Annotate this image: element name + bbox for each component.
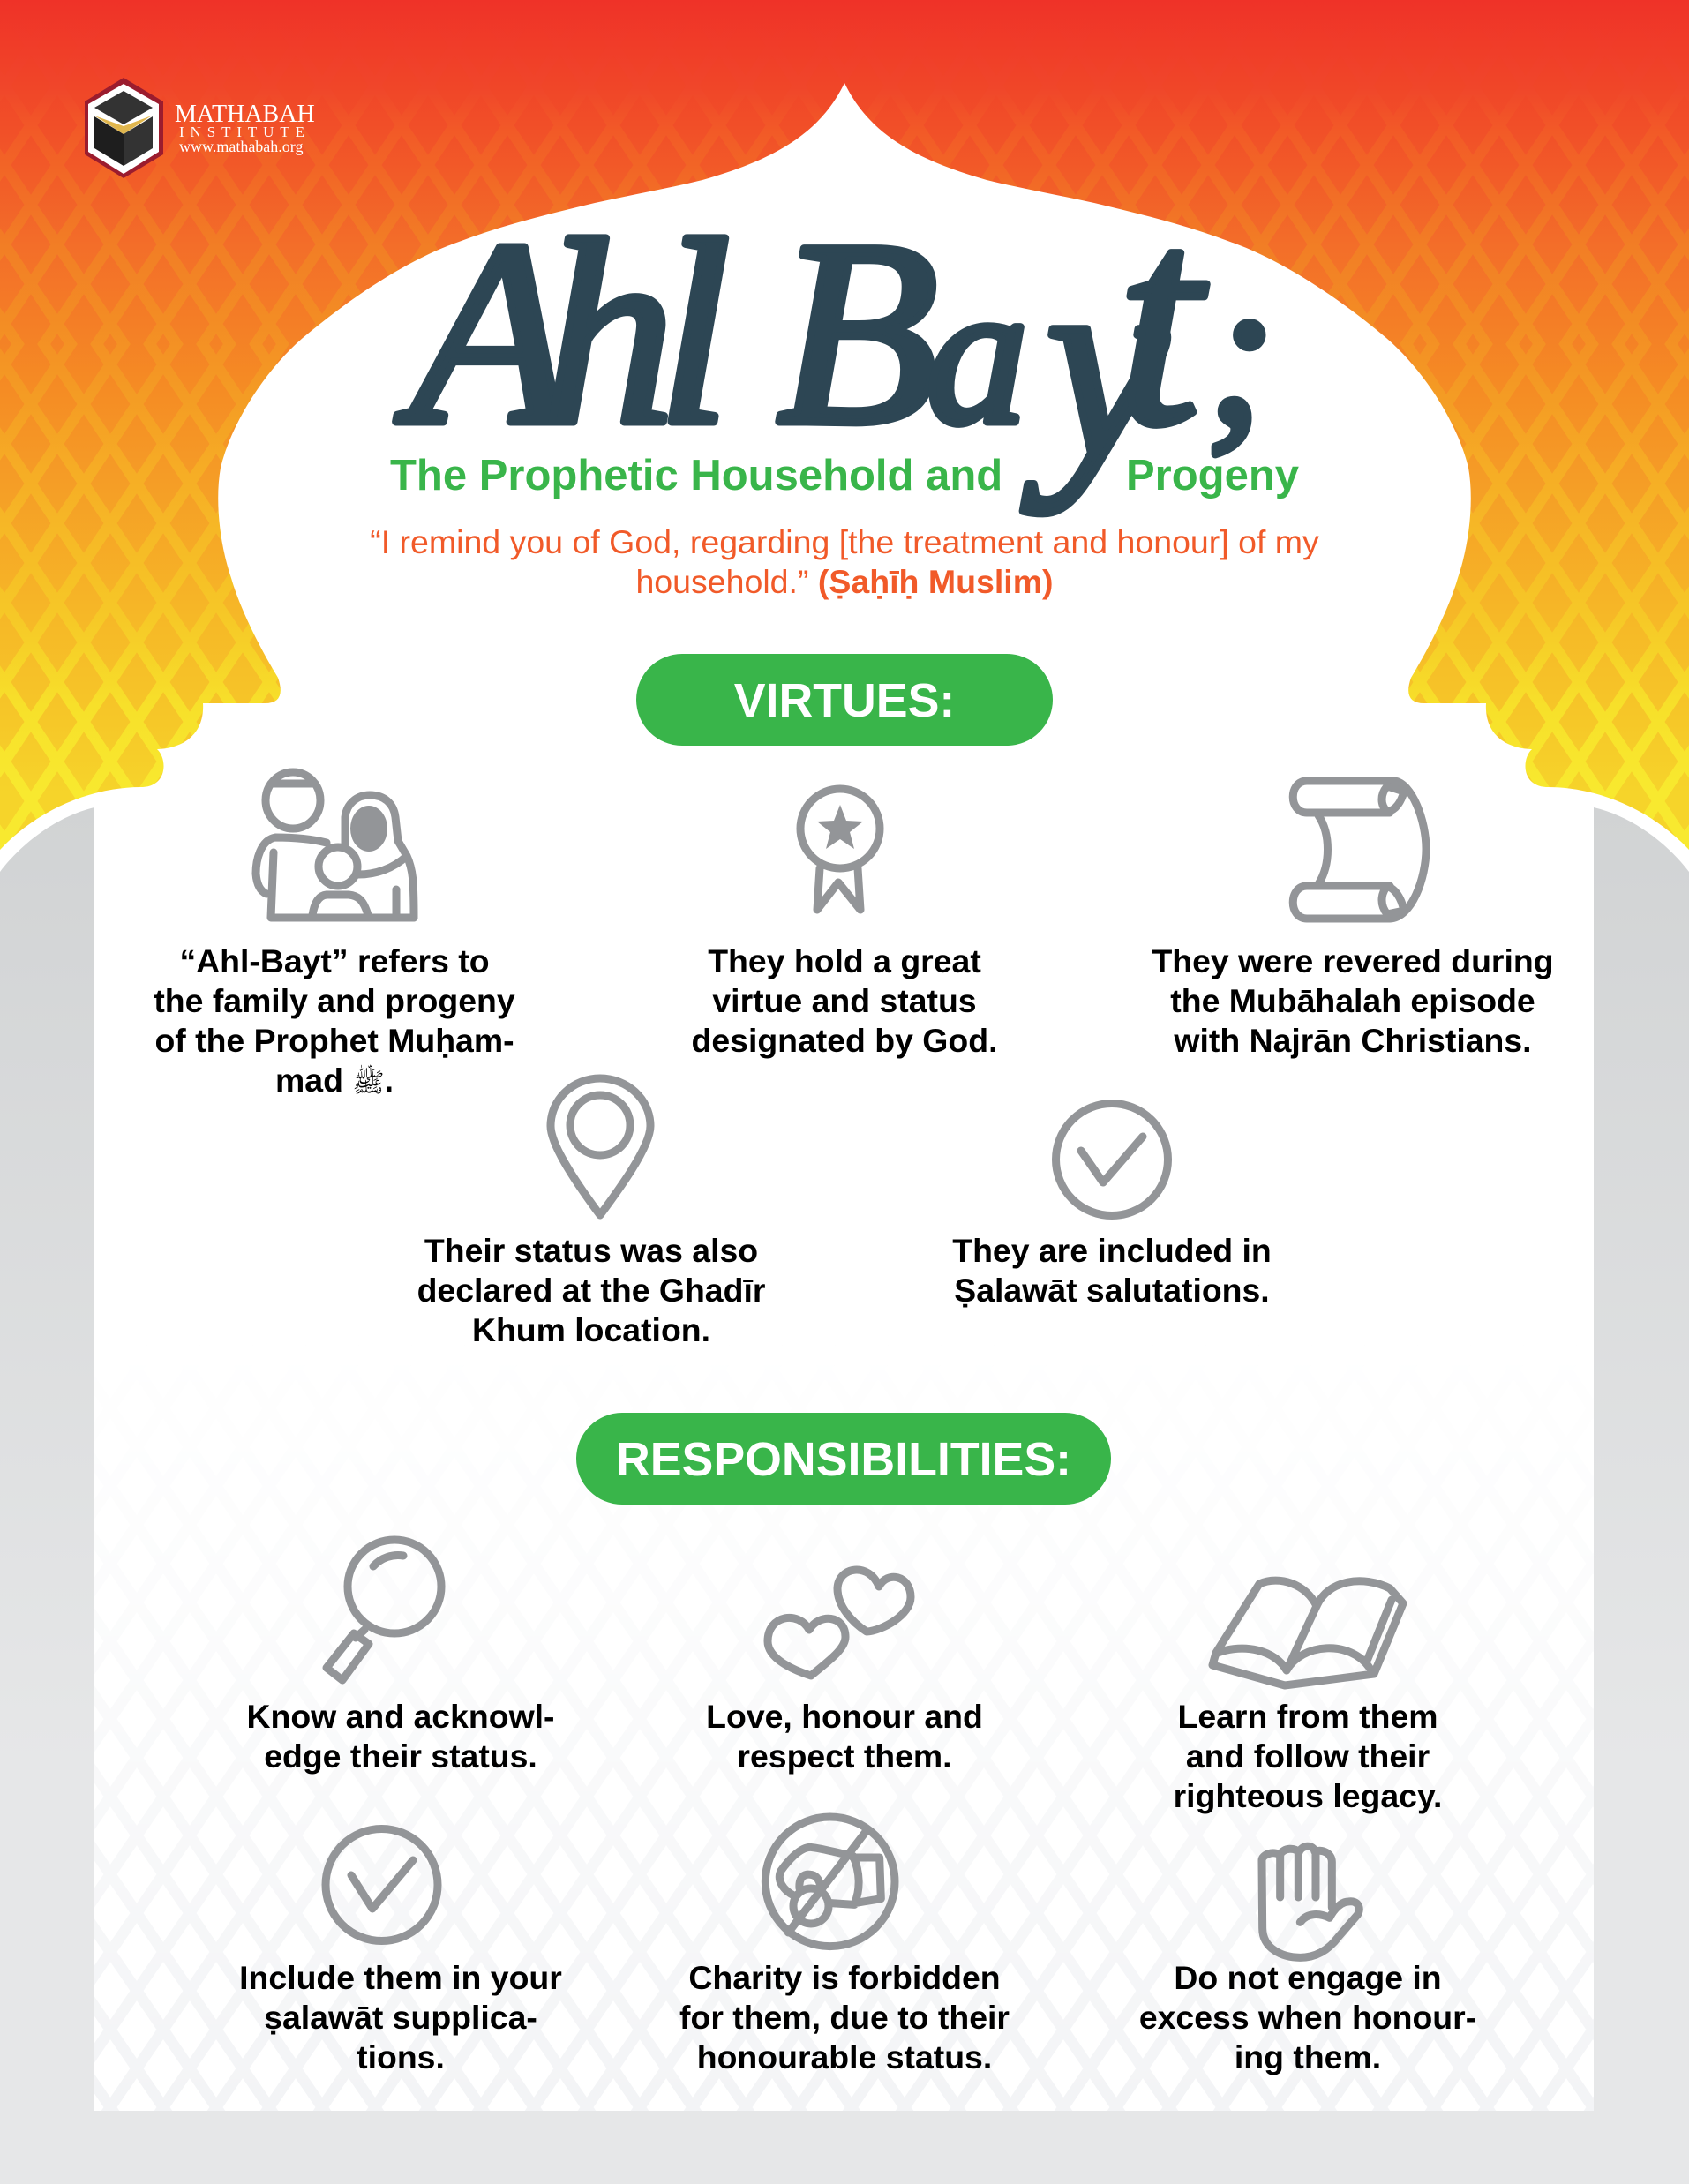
text: include in salawat: ṣalawāt supplica- — [264, 1999, 537, 2036]
quote: household.” (Ṣaḥīḥ Muslim) — [635, 563, 1054, 600]
subtitle: The Prophetic Household and — [390, 452, 1002, 499]
heading: responsibilities: RESPONSIBILITIES: — [616, 1433, 1071, 1486]
text: Mubahalah: They were revered during — [1152, 942, 1554, 979]
dome: white arch shape — [0, 83, 1689, 971]
text: know status — [246, 1698, 554, 1775]
text: Ghadir Khum: Khum location. — [472, 1311, 710, 1348]
text: definition: “Ahl-Bayt” refers to — [179, 942, 490, 979]
text: no excess: ing them. — [1235, 2038, 1381, 2075]
text: Ghadir Khum: Their status was also — [424, 1232, 758, 1269]
text: virtue and status: virtue and status — [712, 982, 977, 1019]
logo: Mathabah Institute — [85, 78, 315, 178]
title: A — [394, 186, 575, 479]
title: l — [657, 186, 731, 479]
text: Mubahalah: the Mubāhalah episode — [1170, 982, 1535, 1019]
background: sunset gradient with lattice — [0, 0, 1689, 882]
text: Mubahalah — [1152, 942, 1554, 1059]
logo: Mathabah Institute: www.mathabah.org — [179, 138, 303, 155]
text: no excess: Do not engage in — [1174, 1959, 1442, 1996]
text: Ghadir Khum: declared at the Ghadīr — [417, 1272, 765, 1309]
title: y — [1020, 212, 1169, 514]
text: no excess — [1139, 1959, 1476, 2075]
icons: virtues and responsibilities — [256, 772, 1426, 1957]
text: no excess: excess when honour- — [1139, 1999, 1476, 2036]
text: Salawat: They are included in — [952, 1232, 1272, 1269]
icon: no charity — [765, 1817, 895, 1947]
text: love and honour: Love, honour and — [706, 1698, 983, 1735]
text: include in salawat: Include them in your — [239, 1959, 562, 1996]
text: Salawat — [952, 1232, 1272, 1309]
text: learn and follow: and follow their — [1186, 1737, 1430, 1775]
text: charity forbidden: honourable status. — [697, 2038, 992, 2075]
title: B — [777, 186, 938, 479]
text: definition: of the Prophet Muḥam- — [154, 1022, 514, 1059]
icon: location pin — [551, 1078, 650, 1215]
text: know status: edge their status. — [264, 1737, 537, 1775]
quote: “I remind you of God, regarding [the treatment and honour] of my — [370, 523, 1319, 560]
logo: Mathabah Institute: MATHABAH — [175, 101, 315, 128]
text: definition: mad ﷺ. — [275, 1062, 394, 1099]
text: love and honour — [706, 1698, 983, 1775]
icon: open book — [1212, 1580, 1403, 1685]
text: Ghadir Khum — [417, 1232, 765, 1348]
text: definition — [154, 942, 515, 1099]
title: a — [927, 241, 1028, 466]
text: virtue and status: They hold a great — [708, 942, 981, 979]
icon: raised hand — [1262, 1846, 1359, 1957]
text: learn and follow: Learn from them — [1177, 1698, 1438, 1735]
side frame: grey panel surround — [0, 807, 1689, 2184]
logo: Mathabah Institute: INSTITUTE — [179, 124, 304, 140]
heading: virtues — [636, 654, 1053, 746]
icon: medal — [800, 789, 880, 910]
text: charity forbidden: Charity is forbidden — [688, 1959, 1001, 1996]
text: definition: the family and progeny — [154, 982, 515, 1019]
text: charity forbidden: for them, due to their — [679, 1999, 1010, 2036]
quote — [370, 523, 1319, 600]
text: virtue and status: designated by God. — [692, 1022, 997, 1059]
title: ; — [1205, 233, 1276, 468]
text: Salawat: Ṣalawāt salutations. — [954, 1272, 1270, 1309]
heading: virtues: VIRTUES: — [734, 674, 955, 727]
text: love and honour: respect them. — [737, 1737, 952, 1775]
icon: magnifier — [327, 1540, 441, 1680]
icon: check circle — [1055, 1103, 1168, 1216]
text: learn and follow: righteous legacy. — [1174, 1777, 1442, 1814]
icon: hearts — [768, 1570, 911, 1676]
subtitle: Progeny — [1126, 452, 1299, 499]
text: learn and follow — [1174, 1698, 1442, 1814]
title: t — [1117, 154, 1211, 487]
text: include in salawat — [239, 1959, 562, 2075]
panel: white content lattice — [94, 1881, 1594, 2111]
heading: responsibilities — [576, 1413, 1111, 1505]
icon: family — [256, 772, 414, 918]
text: include in salawat: tions. — [357, 2038, 445, 2075]
icon: check circle second — [326, 1828, 438, 1941]
text: charity forbidden — [679, 1959, 1010, 2075]
text: know status: Know and acknowl- — [246, 1698, 554, 1735]
title: h — [543, 186, 675, 479]
text: virtue and status — [692, 942, 997, 1059]
text: Mubahalah: with Najrān Christians. — [1174, 1022, 1532, 1059]
icon: scroll — [1293, 781, 1426, 919]
